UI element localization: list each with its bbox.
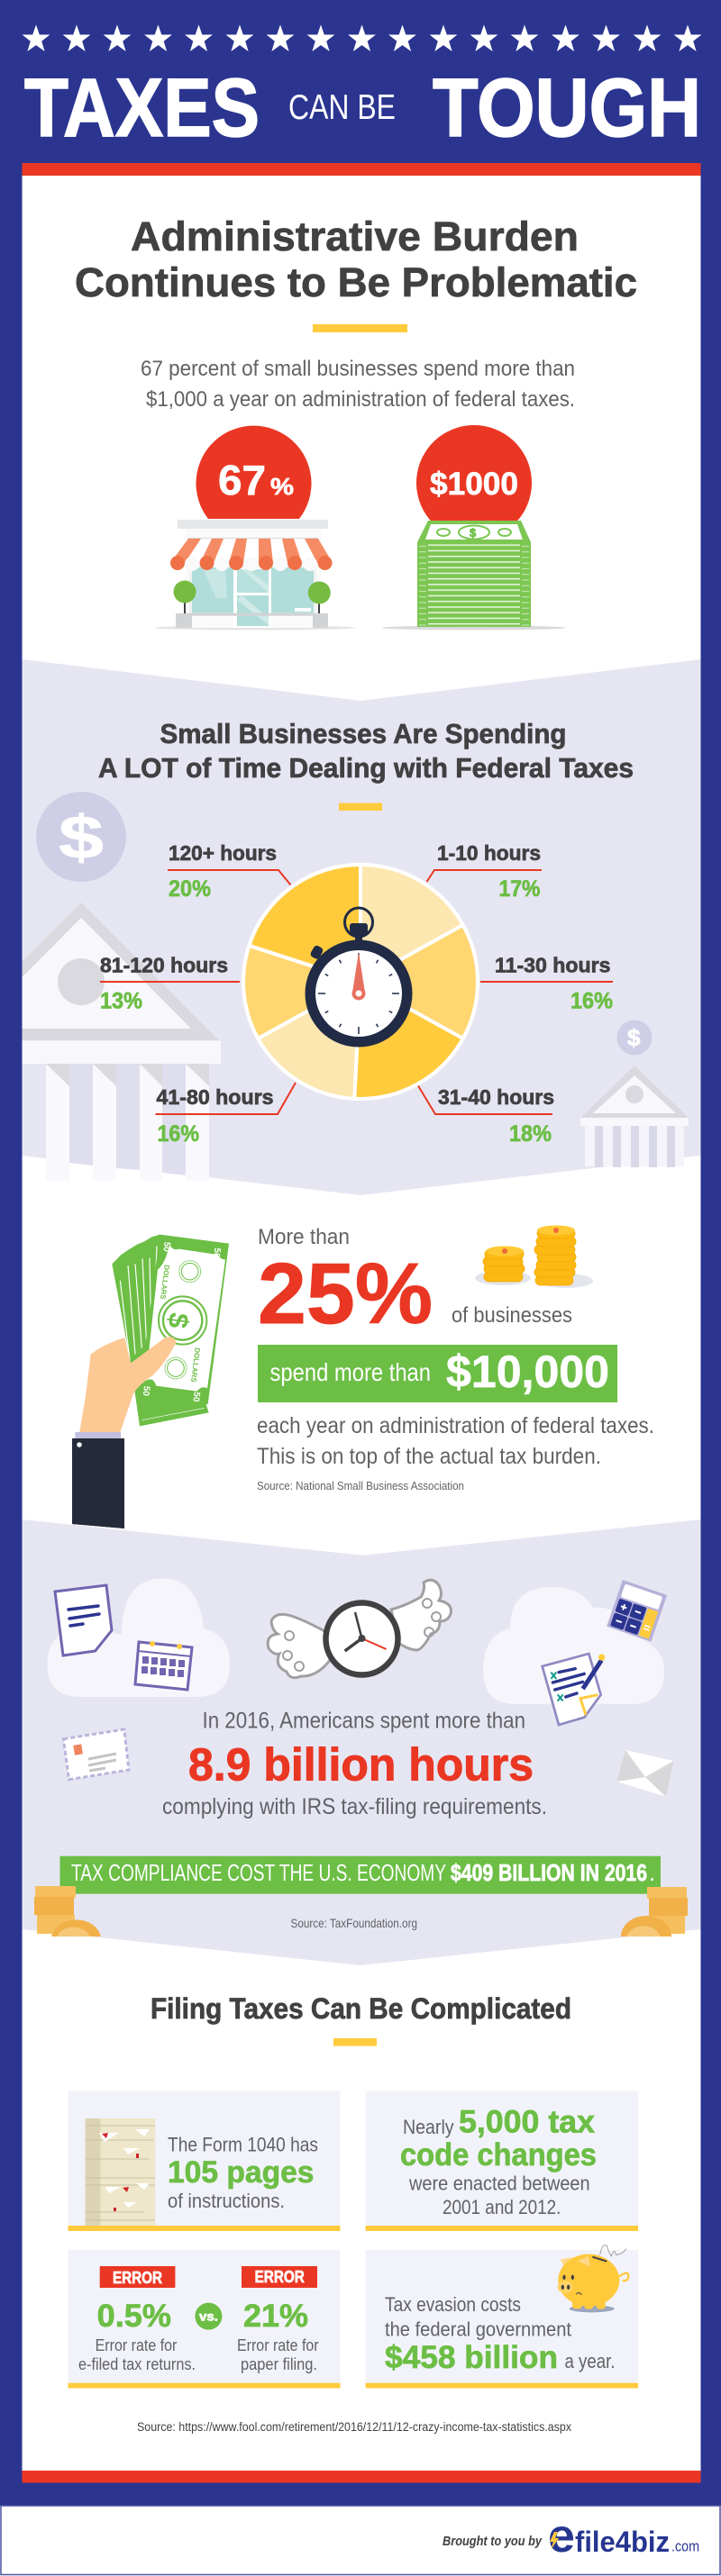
label: 31-40 hours 18% [418,1085,554,1147]
logo: efile4biz: file4biz [575,2526,670,2558]
error badge right: ERROR [255,2268,305,2286]
card: form 1040: of instructions. [168,2190,285,2212]
heading [75,213,637,305]
label: 81-120 hours 13% [100,953,240,1014]
icon: stack of money with $1000: $1000 [430,467,518,502]
top red bar [22,163,701,176]
logo: efile4biz: .com [671,2538,699,2555]
label: 120+ hours 20%: 20% [169,876,211,902]
card: 5,000 tax code changes: were enacted between [408,2172,590,2194]
icon: hand holding money: 50 [211,1247,222,1258]
icon: storefront with 67% [154,426,356,630]
panel: filing taxes [68,1992,638,2434]
section background [22,659,701,1195]
text: each year on administration [257,1413,654,1469]
panel: administrative burden [75,213,637,630]
icon: hand holding money: DOLLARS [189,1347,202,1383]
card: form 1040 [68,2091,341,2231]
card: 5,000 tax code changes: Nearly [403,2116,454,2138]
icon: left coins [34,1886,101,1937]
label: 11-30 hours 16%: 16% [570,989,613,1014]
icon: stack of money with $1000: $ [470,526,477,540]
left cloud [47,1578,230,1697]
icon: big bank [22,903,221,1181]
card: tax evasion [366,2245,638,2389]
text: complying: complying with IRS tax-filing requirements. [162,1794,547,1819]
vs badge [195,2303,222,2330]
header banner [23,25,701,154]
card: tax evasion: Tax evasion costs [385,2293,521,2316]
card: 5,000 tax code changes: code changes [400,2137,597,2172]
right cloud [483,1587,664,1704]
label: 41-80 hours 16%: 41-80 hours [157,1085,274,1109]
panel: time dealing with taxes [22,659,701,1195]
card: 5,000 tax code changes [366,2091,638,2231]
text: more than 25% of businesses: of businesses [452,1303,572,1328]
label: 11-30 hours 16% [480,953,613,1014]
error badge left [100,2266,175,2288]
card: 5,000 tax code changes: 5,000 tax [459,2105,596,2140]
panel: 8.9 billion hours [22,1519,701,1965]
text: each year on administration: each year on administration of federal taxes. [257,1413,654,1438]
label: 1-10 hours 17%: 1-10 hours [437,841,541,865]
label: 120+ hours 20% [168,841,290,902]
callout: tax compliance cost: . [649,1859,655,1886]
text: each year on administration: This is on top of the actual tax burden. [257,1444,601,1469]
heading: Continues to Be Problematic [75,259,637,305]
bottom red bar [22,2471,701,2482]
callout: tax compliance cost: $409 BILLION IN 2016 [451,1859,647,1886]
icon: airmail letter [63,1729,129,1780]
icon: calendar [135,1641,192,1690]
yellow divider [333,2038,377,2046]
label: 31-40 hours 18%: 31-40 hours [438,1085,554,1109]
icon: small dollar coin: $ [627,1024,641,1051]
card: tax evasion: $458 billion [385,2340,558,2375]
icon: stopwatch [305,908,413,1047]
icon: coin stacks [475,1225,593,1288]
intro text [141,357,575,412]
card: error rates: 21% [243,2299,308,2334]
label: 1-10 hours 17% [427,841,542,902]
icon: hand holding money: 50 [160,1241,172,1253]
logo: efile4biz: e [548,2510,575,2562]
text: 2016 americans: In 2016, Americans spent more than [202,1708,525,1733]
icon: paper stack [85,2118,155,2226]
card: error rates: 0.5% [97,2299,171,2334]
sleeve overlap [72,1519,124,1528]
icon: hand holding money: 50 [141,1385,151,1397]
callout: spend more than $10,000 [258,1345,617,1402]
heading: Small Businesses Are Spending [160,718,566,749]
panel: 25% of businesses [72,1225,654,1528]
icon: big dollar coin [36,792,126,882]
icon: stack of money with $1000 [382,425,566,630]
icon: calculator [607,1580,667,1642]
text: 8.9 billion hours: 8.9 billion hours [188,1738,534,1791]
card: form 1040: 105 pages [168,2155,314,2190]
vs badge: vs. [199,2309,218,2324]
icon: hand holding money [72,1235,229,1528]
yellow divider [339,803,382,811]
source: Source: National Small Business Association [257,1480,464,1492]
icon: envelope [616,1750,674,1797]
back bills fan [112,1235,209,1426]
heading: Administrative Burden [131,213,579,259]
callout: tax compliance cost [59,1856,661,1894]
label: 81-120 hours 13%: 81-120 hours [100,953,228,976]
label: 81-120 hours 13%: 13% [100,989,142,1014]
card: error rates: Error rate for [237,2336,319,2354]
heading: Filing Taxes Can Be Complicated [151,1992,571,2025]
card: error rates [68,2250,341,2389]
callout: spend more than $10,000: spend more than [270,1358,431,1386]
logo: efile4biz [548,2510,699,2562]
label: 31-40 hours 18%: 18% [509,1121,552,1147]
label: 1-10 hours 17%: 17% [499,876,541,902]
card: error rates: paper filing. [241,2355,317,2373]
callout: tax compliance cost: TAX COMPLIANCE COST THE U.S. ECONOMY [71,1859,446,1886]
icon: flying clock [268,1580,451,1678]
heading [98,718,634,784]
title: taxes can be tough: TAXES [24,62,260,154]
label: 41-80 hours 16% [155,1083,296,1147]
icon: document [55,1585,112,1655]
card: form 1040: The Form 1040 has [168,2134,318,2156]
error badge right [242,2266,317,2288]
callout: spend more than $10,000: $10,000 [446,1347,609,1397]
label: 11-30 hours 16%: 11-30 hours [495,953,611,976]
icon: piggy bank [558,2245,628,2312]
intro text: 67 percent of small businesses spend more than [141,357,575,381]
label: 41-80 hours 16%: 16% [157,1121,199,1147]
card: tax evasion: a year. [564,2350,615,2372]
footer [1,2506,720,2574]
icon: hand holding money: $ [162,1311,194,1330]
icon: small dollar coin [616,1020,653,1056]
icon: right coins [621,1887,688,1937]
source: Source: https://www.fool.com/retirement/2016/12/11/12-crazy-income-tax-statistics.aspx [137,2420,571,2434]
pie chart [242,863,479,1101]
icon: hand holding money: 50 [190,1392,202,1402]
text: more than 25% of businesses: More than [258,1225,350,1249]
row of stars [23,25,701,51]
icon: small bank [580,1066,689,1167]
card: tax evasion: the federal government [385,2318,571,2340]
icon: storefront with 67%: % [270,473,294,500]
title: taxes can be tough [24,62,701,154]
icon: hand holding money: DOLLARS [159,1265,171,1301]
yellow divider [313,324,407,332]
footer: Brought to you by [443,2534,543,2549]
title: taxes can be tough: CAN BE [288,88,396,127]
label: 120+ hours 20%: 120+ hours [169,841,277,865]
icon: checklist with pencil [543,1654,605,1725]
text: more than 25% of businesses: 25% [258,1246,433,1342]
error badge left: ERROR [113,2269,162,2287]
card: error rates: e-filed tax returns. [78,2355,196,2373]
heading: A LOT of Time Dealing with Federal Taxes [98,752,634,784]
section background [22,1519,701,1965]
intro text: $1,000 a year on administration of federal taxes. [146,387,575,412]
text: more than 25% of businesses [258,1225,572,1342]
icon: storefront with 67%: 67 [218,457,266,503]
card: error rates: Error rate for [96,2336,177,2354]
source: Source: TaxFoundation.org [290,1916,417,1930]
icon: big dollar coin: $ [59,803,104,872]
card: 5,000 tax code changes: 2001 and 2012. [443,2196,561,2218]
